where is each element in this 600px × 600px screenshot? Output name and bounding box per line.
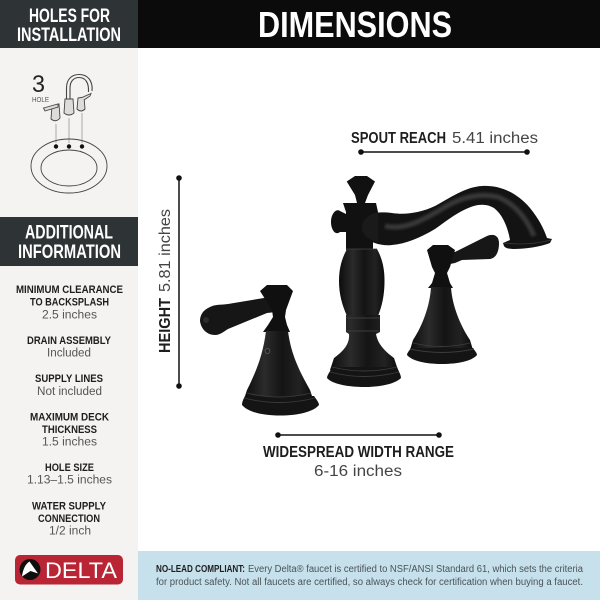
spec: supply lines: SUPPLY LINES [35,373,103,385]
dimension: widespread width range: WIDESPREAD WIDTH RANGE [263,444,454,461]
dimension: widespread width range [263,432,454,480]
icon: three-hole faucet and sink [31,71,107,193]
spec: water supply connection [32,500,107,538]
panel: sidebar [0,0,138,600]
spec: hole size [27,462,112,486]
spec: minimum clearance: 2.5 inches [42,310,97,322]
dimension: height: 5.81 inches [157,209,174,292]
icon: three-hole faucet and sink: HOLE [32,97,49,104]
heading: holes for installation: INSTALLATION [17,25,121,46]
heading: additional information: INFORMATION [18,242,121,263]
dimension: widespread width range: 6-16 inches [314,463,402,480]
dimension: spout reach: 5.41 inches [452,130,538,147]
logo: Delta: DELTA [45,558,117,583]
callout: no-lead compliant: NO-LEAD COMPLIANT: [156,564,245,575]
spec: minimum clearance [16,284,123,322]
logo: Delta [15,555,123,584]
faucet photo [200,176,552,416]
callout: no-lead compliant: Every Delta® faucet is certified to NSF/ANSI Standard 61, which sets the criteria [248,564,583,575]
icon: three-hole faucet and sink: 3 [32,71,45,98]
spec: water supply connection: WATER SUPPLY [32,500,107,512]
heading: holes for installation [0,0,138,48]
spout [368,186,552,249]
spec: maximum deck thickness: MAXIMUM DECK [30,412,109,424]
right handle [407,235,499,364]
spec: drain assembly: Included [47,348,91,360]
dimension: height [157,175,182,389]
spec: supply lines: Not included [37,386,102,398]
spec: supply lines [35,373,103,398]
heading: holes for installation: HOLES FOR [29,6,110,27]
callout: no-lead compliant: for product safety. Not all faucets are certified, so always check for certification when buying a faucet. [156,577,583,588]
spec: drain assembly: DRAIN ASSEMBLY [27,335,112,347]
spec: minimum clearance: TO BACKSPLASH [30,296,109,308]
title bar: dimensions: DIMENSIONS [258,4,452,45]
spec: maximum deck thickness: 1.5 inches [42,436,97,448]
spec: maximum deck thickness [30,412,109,448]
spec: maximum deck thickness: THICKNESS [42,424,97,436]
spec: water supply connection: 1/2 inch [49,526,91,538]
spec: water supply connection: CONNECTION [38,513,100,525]
center body [327,176,401,387]
dimension: height: HEIGHT [157,298,174,353]
spec: hole size: HOLE SIZE [45,462,94,474]
left handle [200,285,319,416]
dimension: spout reach [351,130,538,155]
heading: additional information [0,217,138,266]
spec: drain assembly [27,335,112,360]
callout: no-lead compliant [138,551,600,600]
heading: additional information: ADDITIONAL [25,222,113,244]
spec: minimum clearance: MINIMUM CLEARANCE [16,284,123,296]
dimension: spout reach: SPOUT REACH [351,130,446,147]
title bar: dimensions [138,0,600,48]
spec: hole size: 1.13–1.5 inches [27,474,112,486]
